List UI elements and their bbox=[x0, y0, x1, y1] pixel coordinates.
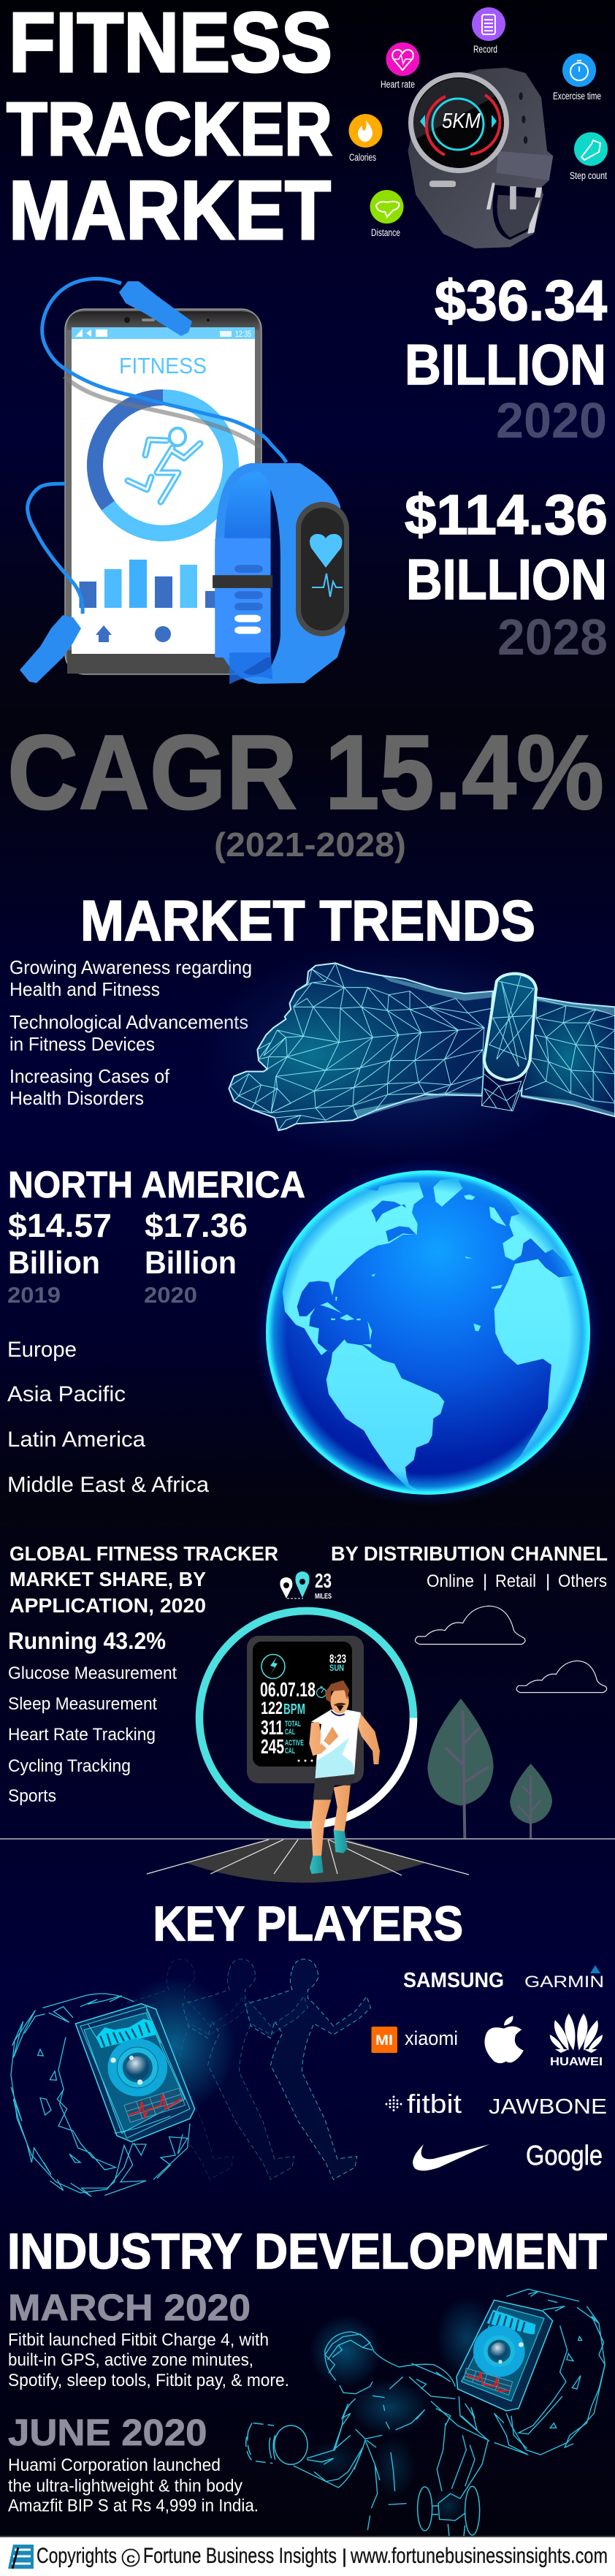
tracker pod bbox=[484, 974, 536, 1080]
trend list: Technological Advancements bbox=[9, 1011, 248, 1033]
logo: xiaomi: MI bbox=[375, 2033, 393, 2049]
smartwatch panel: 06.07.18 bbox=[260, 1678, 316, 1701]
application list: Sleep Measurement bbox=[8, 1694, 157, 1714]
icon: map pins with miles bbox=[280, 1569, 332, 1601]
development: march 2020 bbox=[8, 2287, 289, 2390]
other regions: Asia Pacific bbox=[7, 1382, 126, 1406]
logo: garmin bbox=[524, 1965, 604, 1991]
icon: runner bbox=[128, 428, 200, 502]
icon: calories: Calories bbox=[349, 152, 376, 163]
development: june 2020: the ultra-lightweight & thin body bbox=[8, 2477, 242, 2496]
lower strap bbox=[481, 1059, 530, 1111]
mediterranean bbox=[515, 1238, 572, 1277]
bar chart bbox=[79, 560, 217, 608]
heading: distribution channel: | bbox=[546, 1571, 550, 1591]
phone with fitness app and blue band bbox=[20, 279, 349, 685]
phone bbox=[65, 309, 261, 674]
heading: market trends: MARKET TRENDS bbox=[80, 888, 535, 953]
trend list: Health Disorders bbox=[9, 1087, 144, 1109]
clouds bbox=[415, 1606, 607, 1693]
fitness band bbox=[213, 463, 349, 685]
market size 2028: 2028 bbox=[497, 609, 608, 666]
application list: Glucose Measurement bbox=[8, 1664, 177, 1683]
logo: samsung: SAMSUNG bbox=[403, 1969, 504, 1992]
progress ring bbox=[199, 1611, 413, 1825]
europe bbox=[489, 1188, 576, 1275]
smartwatch panel: TOTAL bbox=[285, 1720, 301, 1729]
logo: jawbone: JAWBONE bbox=[489, 2095, 607, 2119]
globe bbox=[254, 1159, 608, 1506]
development: june 2020: JUNE 2020 bbox=[8, 2412, 207, 2453]
icon: distance bbox=[370, 190, 403, 238]
mesh bbox=[230, 963, 615, 1130]
running man bbox=[309, 1680, 380, 1874]
heading: application share: APPLICATION, 2020 bbox=[9, 1594, 206, 1617]
development: june 2020: Huami Corporation launched bbox=[8, 2455, 221, 2475]
logo: google: Google bbox=[526, 2141, 603, 2171]
regional stats: north america: $14.57 bbox=[8, 1207, 112, 1244]
wireframe athlete with band bbox=[246, 2289, 605, 2537]
rear shoe bbox=[334, 1830, 348, 1853]
title bbox=[7, 0, 332, 257]
front leg bbox=[311, 1799, 331, 1856]
logo: garmin: GARMIN bbox=[524, 1973, 604, 1991]
front shoe bbox=[310, 1856, 324, 1874]
CAGR: (2021-2028) bbox=[214, 826, 406, 864]
back arm bbox=[358, 1713, 380, 1764]
greenland bbox=[433, 1178, 462, 1207]
icon: heart rate: Heart rate bbox=[381, 79, 415, 90]
regional stats: north america: Billion bbox=[145, 1245, 237, 1281]
heading: application share bbox=[9, 1542, 278, 1617]
forearm bbox=[522, 997, 615, 1116]
development: march 2020: MARCH 2020 bbox=[8, 2287, 251, 2328]
wireframe runners and wristband bbox=[11, 1959, 370, 2197]
heading: distribution channel: Online bbox=[427, 1571, 474, 1591]
hudson bay bbox=[371, 1200, 416, 1242]
trend list: Health and Fitness bbox=[9, 978, 160, 1000]
smartwatch panel: CAL bbox=[285, 1728, 295, 1737]
front arm bbox=[309, 1722, 338, 1756]
ground and road bbox=[0, 1838, 615, 1883]
dumbbells bbox=[246, 2423, 480, 2537]
glows bbox=[305, 2296, 499, 2523]
application list: Cycling Tracking bbox=[8, 1756, 131, 1776]
athlete outline bbox=[294, 2332, 489, 2530]
trend list: Growing Awareness regarding bbox=[9, 956, 252, 978]
development: march 2020: built-in GPS, active zone minutes, bbox=[8, 2350, 253, 2370]
logo: xiaomi bbox=[371, 2027, 458, 2053]
heading: distribution channel bbox=[331, 1542, 608, 1591]
application list: Running 43.2% bbox=[8, 1628, 166, 1654]
icon: record bbox=[472, 7, 505, 55]
smartwatch with feature icons bbox=[349, 7, 608, 248]
runners bbox=[121, 1959, 370, 2179]
logo: xiaomi: xiaomi bbox=[405, 2027, 458, 2049]
copyright line bbox=[37, 2544, 608, 2568]
trend list: Increasing Cases of bbox=[9, 1065, 170, 1087]
band outline bbox=[494, 2289, 605, 2455]
copyright line: c bbox=[126, 2551, 135, 2567]
market size 2028: $114.36 bbox=[405, 484, 608, 546]
icon: map pins with miles: 23 bbox=[315, 1569, 332, 1592]
iceland bbox=[464, 1194, 475, 1200]
market size 2020: 2020 bbox=[496, 392, 607, 449]
phone: 12:35 bbox=[235, 329, 251, 339]
logo: nike bbox=[413, 2144, 489, 2171]
north america bbox=[283, 1182, 424, 1355]
trend list: in Fitness Devices bbox=[9, 1033, 155, 1055]
phone: FITNESS bbox=[119, 353, 207, 378]
smartwatch panel: 122 bbox=[261, 1699, 283, 1718]
logo: fortune business insights bbox=[8, 2545, 34, 2569]
icon: exercise time bbox=[553, 53, 601, 102]
logo: huawei: HUAWEI bbox=[550, 2056, 603, 2068]
brand logos bbox=[371, 1965, 607, 2171]
development: june 2020 bbox=[8, 2412, 259, 2516]
smartwatch panel: SUN bbox=[329, 1663, 344, 1673]
heading: application share: GLOBAL FITNESS TRACKER bbox=[9, 1542, 278, 1565]
shorts bbox=[313, 1776, 356, 1799]
other regions: Europe bbox=[7, 1338, 77, 1362]
heading: distribution channel: Others bbox=[558, 1571, 607, 1591]
copyright line: Fortune Business Insights bbox=[143, 2544, 337, 2568]
icon: map pins with miles: MILES bbox=[315, 1593, 332, 1601]
trees bbox=[427, 1699, 552, 1839]
icon: runner badge bbox=[261, 1654, 285, 1679]
wristband screen bbox=[75, 2004, 195, 2142]
tracker screen bbox=[296, 502, 349, 636]
copyright line: | bbox=[342, 2545, 347, 2567]
heading: distribution channel: | bbox=[483, 1571, 487, 1591]
copyright line: Copyrights bbox=[37, 2544, 117, 2568]
caribbean and atlantic islands bbox=[320, 1257, 503, 1348]
watch bbox=[408, 68, 553, 248]
logo: huawei bbox=[550, 2013, 603, 2068]
trend list bbox=[9, 956, 252, 1109]
shirt bbox=[311, 1710, 361, 1778]
development: june 2020: Amazfit BIP S at Rs 4,999 in India. bbox=[8, 2496, 259, 2516]
icon: calories bbox=[349, 114, 383, 163]
activity ring bbox=[95, 397, 231, 533]
development: march 2020: Spotify, sleep tools, Fitbit pay, & more. bbox=[8, 2371, 289, 2390]
heading: application share: MARKET SHARE, BY bbox=[9, 1568, 206, 1590]
logo: fitbit: fitbit bbox=[407, 2089, 462, 2119]
south america bbox=[326, 1339, 444, 1492]
smartwatch panel: ACTIVE bbox=[285, 1739, 304, 1748]
smartwatch panel: 245 bbox=[261, 1735, 284, 1758]
head bbox=[330, 1688, 349, 1714]
other regions bbox=[7, 1338, 209, 1497]
edge highlights bbox=[353, 975, 615, 1119]
wireframe hand with tracker bbox=[197, 942, 615, 1162]
wristband bbox=[322, 1740, 330, 1749]
market size 2028 bbox=[405, 484, 608, 666]
logo: fitbit bbox=[386, 2089, 462, 2119]
application list: Sports bbox=[8, 1786, 56, 1806]
band screen bbox=[457, 2300, 553, 2411]
title: MARKET bbox=[9, 164, 331, 257]
icon: record: Record bbox=[473, 44, 497, 55]
other regions: Latin America bbox=[7, 1428, 145, 1452]
app navigation icons bbox=[96, 625, 171, 642]
regional stats: north america: NORTH AMERICA bbox=[8, 1164, 305, 1205]
wristband outline bbox=[11, 1994, 190, 2197]
development: march 2020: Fitbit launched Fitbit Charge 4, with bbox=[8, 2331, 269, 2350]
smartwatch panel: 311 bbox=[261, 1716, 283, 1739]
application list: Heart Rate Tracking bbox=[8, 1725, 156, 1745]
other regions: Middle East & Africa bbox=[7, 1473, 209, 1497]
market size 2020 bbox=[405, 268, 607, 449]
jump rope bbox=[20, 279, 286, 683]
application list bbox=[8, 1628, 177, 1806]
icon: stopwatch bbox=[317, 1687, 326, 1698]
regional stats: north america: 2019 bbox=[7, 1282, 61, 1308]
smartwatch panel bbox=[247, 1636, 364, 1783]
regional stats: north america: Billion bbox=[8, 1245, 100, 1281]
icon: heart rate bbox=[381, 42, 419, 90]
smartwatch panel: BPM bbox=[283, 1702, 305, 1718]
market size 2020: $36.34 bbox=[435, 268, 607, 332]
heading: distribution channel: Retail bbox=[495, 1571, 536, 1591]
footer bbox=[0, 2536, 615, 2576]
smartwatch panel: 8:23 bbox=[329, 1652, 346, 1666]
heading: distribution channel: BY DISTRIBUTION CHANNEL bbox=[331, 1542, 608, 1565]
africa bbox=[494, 1259, 587, 1466]
heading: key players: KEY PLAYERS bbox=[153, 1897, 463, 1951]
regional stats: north america bbox=[7, 1164, 305, 1308]
uk and scandinavia edge bbox=[489, 1207, 506, 1226]
fist bbox=[229, 963, 493, 1130]
smartwatch panel: CAL bbox=[285, 1747, 295, 1756]
logo: apple bbox=[484, 2016, 524, 2063]
icon: step count bbox=[570, 132, 608, 181]
watch: 5KM bbox=[442, 110, 481, 133]
regional stats: north america: 2020 bbox=[144, 1282, 197, 1308]
icon: distance: Distance bbox=[371, 227, 400, 238]
title: TRACKER bbox=[7, 87, 332, 171]
rear leg bbox=[334, 1784, 351, 1832]
regional stats: north america: $17.36 bbox=[145, 1207, 248, 1244]
